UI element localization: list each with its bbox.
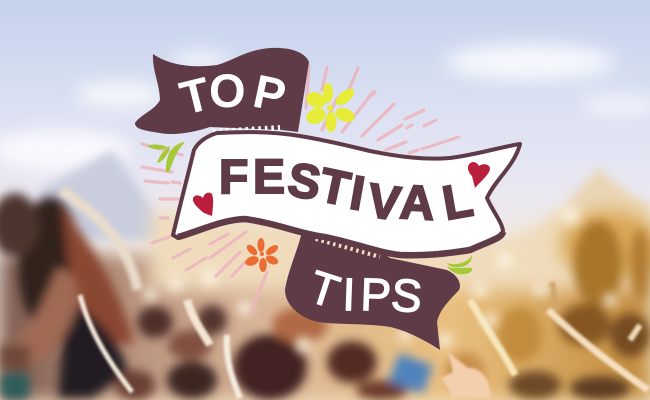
icon: heart right: [468, 162, 490, 188]
crowd silhouettes right: [574, 221, 622, 309]
banner bottom ink edge: [178, 219, 503, 255]
icon: green leaves right: [447, 255, 472, 274]
bokeh highlights: [168, 276, 184, 292]
heading: TOP: TOP: [175, 64, 291, 125]
icon: yellow flower: [304, 83, 357, 132]
icon: heart left: [193, 193, 213, 216]
banner: festival: [173, 132, 520, 255]
banner: top: [135, 48, 309, 134]
icon: green leaves top left: [147, 142, 185, 172]
banner: tips: [285, 228, 460, 350]
sun rays: [142, 66, 459, 314]
icon: orange flower: [244, 238, 280, 272]
heading: TIPS: TIPS: [303, 260, 424, 323]
crowd silhouettes left: [18, 197, 82, 333]
banner fold stitches: top: [213, 128, 280, 132]
heading: FESTIVAL: FESTIVAL: [219, 151, 477, 231]
banner fold stitches: tips: [316, 238, 380, 256]
hand: [441, 352, 491, 398]
raised arms and light streaks: [80, 295, 132, 392]
